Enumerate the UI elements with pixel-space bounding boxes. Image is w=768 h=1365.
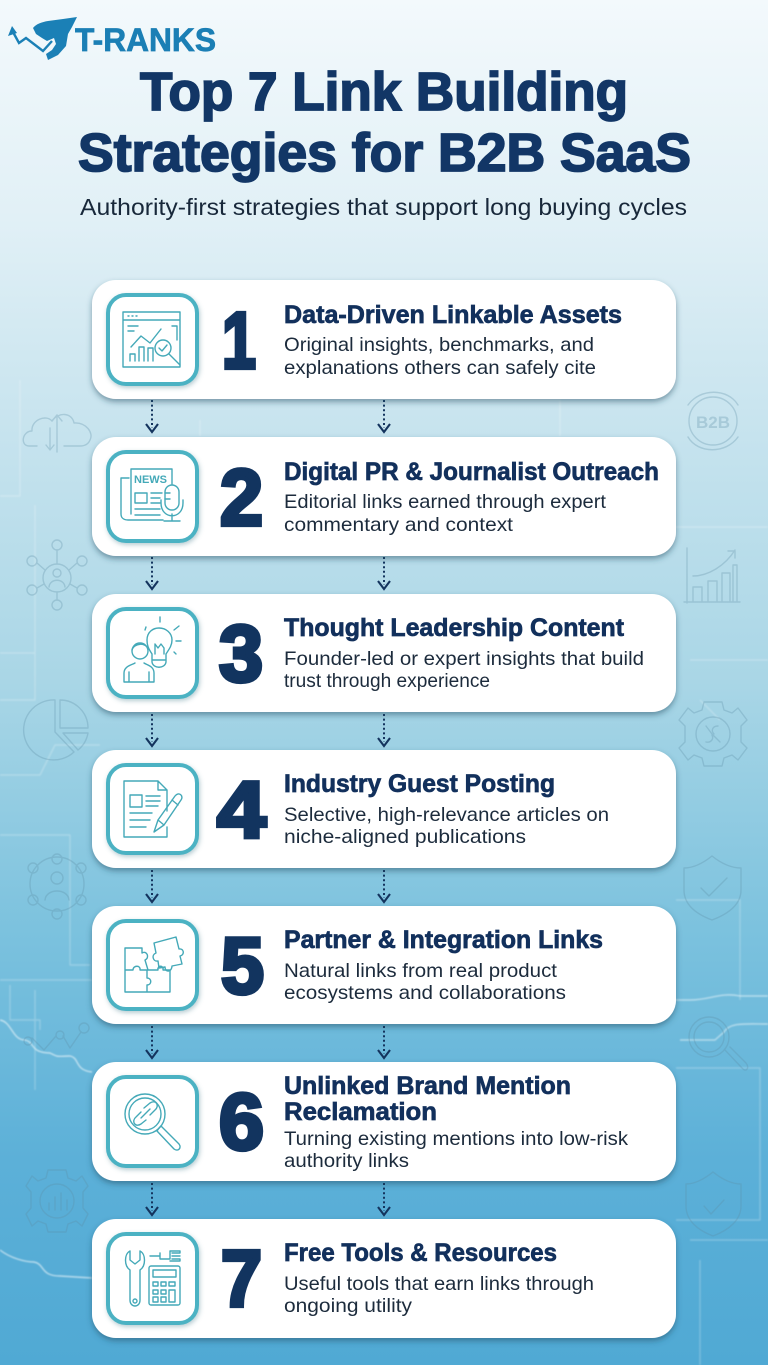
description: authority links: [284, 1150, 409, 1172]
number 6: 6: [219, 1077, 264, 1166]
description: Turning existing mentions into low-risk: [284, 1128, 628, 1150]
heading: Data-Driven Linkable Assets: [284, 301, 622, 329]
description: Founder-led or expert insights that build: [284, 648, 644, 670]
arrow pair: 6 to 7: [146, 1183, 390, 1215]
logo wordmark: T-RANKS: [75, 22, 216, 58]
description: [284, 648, 644, 692]
title: [78, 62, 691, 183]
icon: data dashboard with magnifier: [108, 295, 197, 384]
heading: Thought Leadership Content: [284, 614, 625, 642]
panel: strategy 5: [92, 906, 676, 1024]
description: [284, 1128, 628, 1172]
arrows between cards: [146, 400, 390, 1215]
panel: strategy 4: [92, 750, 676, 868]
heading: Digital PR & Journalist Outreach: [284, 458, 659, 486]
title: Strategies for B2B SaaS: [78, 123, 691, 183]
decorative icon: B2B cycle: B2B: [696, 413, 730, 432]
panel: strategy 1: [92, 280, 676, 399]
arrow pair: 1 to 2: [146, 400, 390, 432]
icon: newspaper with microphone: [108, 452, 197, 541]
number 3: 3: [219, 609, 263, 698]
title: Top 7 Link Building: [140, 62, 628, 122]
decorative icon: user network: [27, 540, 87, 610]
description: trust through experience: [284, 670, 490, 692]
number 5: 5: [221, 921, 264, 1010]
panel: strategy 7: [92, 1219, 676, 1338]
description: explanations others can safely cite: [284, 357, 596, 379]
icon: person with light bulb: [108, 609, 197, 697]
description: ecosystems and collaborations: [284, 982, 566, 1004]
arrow pair: 2 to 3: [146, 557, 390, 589]
panel: strategy 3: [92, 594, 676, 712]
decorative icon: people network: [28, 854, 86, 919]
decorative icon: shield check (upper): [684, 856, 741, 920]
heading: Reclamation: [284, 1098, 437, 1126]
description: Original insights, benchmarks, and: [284, 334, 594, 356]
description: commentary and context: [284, 514, 514, 536]
heading: [284, 1072, 571, 1126]
panel: strategy 6: [92, 1062, 676, 1181]
panel: strategy 2: [92, 437, 676, 556]
heading: Partner & Integration Links: [284, 926, 603, 954]
logo mark: dinosaur with rising arrow: [8, 17, 77, 60]
background circuit lines: [0, 380, 768, 1365]
number 2: 2: [220, 453, 263, 542]
arrow pair: 4 to 5: [146, 870, 390, 902]
arrow pair: 5 to 6: [146, 1026, 390, 1058]
heading: Unlinked Brand Mention: [284, 1072, 571, 1100]
number 7: 7: [221, 1234, 262, 1323]
description: Useful tools that earn links through: [284, 1273, 594, 1295]
description: Editorial links earned through expert: [284, 491, 607, 513]
subtitle: Authority-first strategies that support long buying cycles: [80, 194, 687, 220]
icon: wrench, screwdriver and calculator: [108, 1234, 197, 1323]
decorative icon: cloud sync: [23, 414, 91, 452]
description: ongoing utility: [284, 1295, 412, 1317]
decorative icon: B2B cycle: [688, 392, 738, 450]
description: Selective, high-relevance articles on: [284, 804, 609, 826]
decorative icon: pie chart: [24, 700, 88, 760]
number 1: 1: [222, 296, 256, 385]
description: [284, 804, 609, 848]
icon: newspaper with microphone: NEWS: [134, 474, 167, 486]
arrow pair: 3 to 4: [146, 714, 390, 746]
decorative icon: line chart: [24, 1023, 89, 1050]
heading: Industry Guest Posting: [284, 770, 555, 798]
icon: puzzle pieces: [108, 921, 197, 1009]
decorative icon: magnifier: [689, 1017, 748, 1070]
description: Natural links from real product: [284, 960, 558, 982]
description: [284, 960, 566, 1004]
heading: Free Tools & Resources: [284, 1239, 557, 1267]
decorative icon: gear with chart: [26, 1170, 88, 1232]
icon: magnifier with chain link: [108, 1077, 197, 1166]
decorative icon: shield check (lower): [686, 1172, 741, 1236]
description: [284, 334, 596, 379]
icon: document with pen: [108, 765, 197, 853]
logo: T-RANKS: [8, 17, 216, 60]
description: [284, 1273, 594, 1317]
description: niche-aligned publications: [284, 826, 526, 848]
description: [284, 491, 607, 536]
number 4: 4: [217, 765, 267, 854]
decorative icon: bar chart growth: [684, 548, 740, 603]
decorative icon: gear with wrench: [679, 702, 747, 766]
